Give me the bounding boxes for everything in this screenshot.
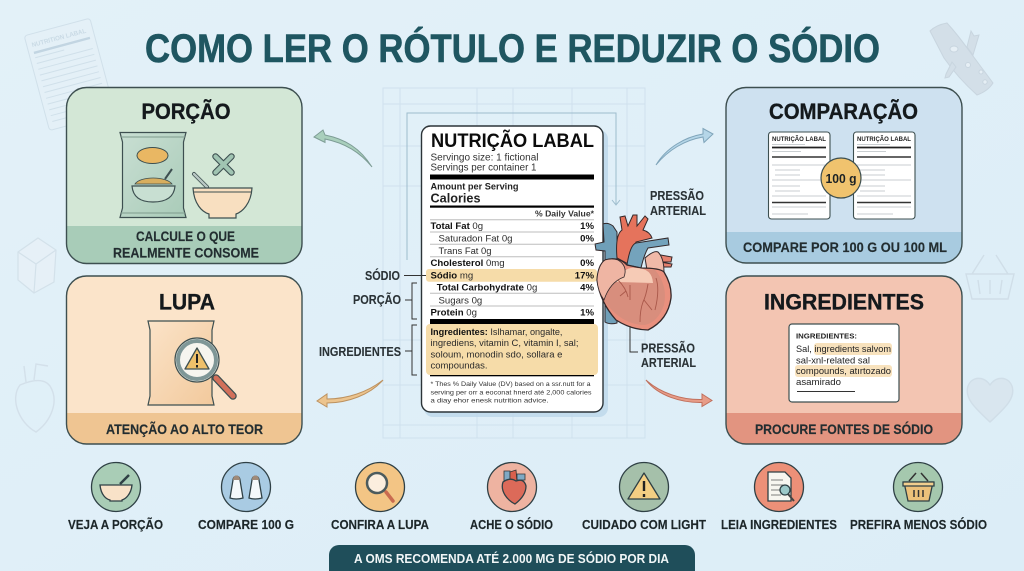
callout: sódio: SÓDIO (365, 268, 400, 283)
callout: pressão arterial bottom (630, 326, 696, 370)
nutrient rows: Total Fat 0g (430, 221, 483, 232)
carbohydrate and protein rows: Sugars 0g (438, 295, 482, 306)
servings (430, 153, 538, 174)
callout: ingredientes: INGREDIENTES (319, 344, 401, 359)
footnote: serving per orr a eoconat hnerd até 2,000 calories (430, 390, 592, 396)
banner: oms recommendation (329, 545, 695, 571)
decorative icon: heart right (967, 378, 1013, 422)
nutrient rows: 0% (580, 233, 594, 244)
step: cuidado com light: CUIDADO COM LIGHT (582, 517, 706, 532)
card: ingredients list: Sal, ingredients salvom (796, 344, 891, 355)
step: veja a porção (68, 462, 163, 532)
footer: ingredientes: PROCURE FONTES DE SÓDIO (755, 422, 933, 437)
decorative icon: nutrition label sheet (24, 18, 115, 131)
footer: porção: REALMENTE CONSOME (113, 246, 259, 260)
step: cuidado com light (582, 462, 706, 532)
step: veja a porção: VEJA A PORÇÃO (68, 517, 163, 532)
carbohydrate and protein rows: 1% (580, 307, 594, 318)
nutrient rows: 1% (580, 221, 594, 232)
calories: Calories (430, 191, 481, 205)
footnote: * Thes % Daily Value (DV) based on a ssr.nutt for a (430, 381, 591, 388)
decorative icon: artery (930, 23, 993, 95)
card: label left: NUTRIÇÃO LABAL (772, 136, 826, 143)
footer: comparação: COMPARE POR 100 G OU 100 ML (743, 240, 947, 255)
card: ingredients list: asamirado (796, 377, 841, 388)
step: compare 100 g (198, 462, 294, 532)
nutrient rows: Cholesterol 0mg (430, 258, 505, 269)
callout: pressão arterial top: PRESSÃO (650, 188, 704, 203)
callout: pressão arterial top: ARTERIAL (650, 203, 706, 218)
icon: snack bag (120, 132, 186, 218)
card: label left (768, 132, 830, 219)
nutrient rows (430, 209, 595, 269)
calories (430, 181, 519, 205)
sodium row highlight: 17% (575, 270, 594, 281)
footer: porção: CALCULE O QUE (136, 229, 235, 244)
badge: 100 g (821, 158, 861, 198)
footnote (430, 381, 592, 405)
heading: porção: PORÇÃO (142, 99, 230, 124)
carbohydrate and protein rows: 4% (580, 283, 594, 294)
footnote: a diay ehor enesk nutrition advice. (430, 398, 549, 405)
arrow: to ingredientes (646, 380, 712, 406)
calories: Amount per Serving (430, 181, 519, 192)
banner: oms recommendation: A OMS RECOMENDA ATÉ 2.000 MG DE SÓDIO POR DIA (354, 551, 670, 566)
card: ingredients list: INGREDIENTES: (796, 332, 857, 340)
callout: ingredientes (319, 325, 417, 375)
nutrient rows: Saturadon Fat 0g (438, 233, 512, 244)
step: prefira menos sódio (850, 462, 987, 532)
callout: pressão arterial bottom: ARTERIAL (641, 355, 696, 370)
carbohydrate and protein rows: Total Carbohydrate 0g (437, 283, 537, 294)
panel: porção (66, 88, 302, 264)
step: leia ingredientes (721, 462, 837, 532)
callout: pressão arterial bottom: PRESSÃO (641, 340, 695, 356)
step: ache o sódio (470, 462, 553, 532)
step: confira a lupa (331, 462, 430, 532)
ingredients highlight: compoundas. (430, 361, 488, 372)
card: ingredients list: sal-xnl-related sal (796, 356, 870, 366)
nutrient rows: 0% (580, 258, 594, 269)
sodium row highlight: Sódio mg (430, 270, 473, 281)
callout: pressão arterial top (650, 188, 706, 218)
footer: porção (113, 229, 259, 260)
heading: lupa: LUPA (159, 290, 215, 314)
card: label right (854, 132, 915, 219)
sodium row highlight (426, 269, 597, 282)
callout: porção (353, 283, 417, 319)
step: compare 100 g: COMPARE 100 G (198, 517, 294, 532)
icon: bowl (193, 174, 252, 218)
callout: porção: PORÇÃO (353, 292, 401, 307)
nutrient rows: % Daily Value* (535, 209, 595, 219)
servings: Servings per container 1 (430, 163, 537, 174)
panel: comparação (726, 88, 962, 263)
panel: ingredientes (726, 276, 962, 444)
servings: Servingo size: 1 fictional (430, 153, 538, 164)
badge: 100 g: 100 g (826, 171, 857, 186)
arrow: frame line to heart (407, 113, 620, 260)
carbohydrate and protein rows: Protein 0g (430, 307, 477, 318)
callout: sódio (365, 268, 426, 283)
decorative icon: salt crystal (18, 238, 56, 293)
card: label right: NUTRIÇÃO LABAL (857, 136, 911, 143)
decorative icon: basket (966, 255, 1014, 299)
step: leia ingredientes: LEIA INGREDIENTES (721, 517, 837, 532)
label title: NUTRIÇÃO LABAL (431, 130, 594, 152)
ingredients highlight (426, 324, 598, 375)
step: prefira menos sódio: PREFIRA MENOS SÓDIO (850, 517, 987, 532)
heading: ingredientes: INGREDIENTES (764, 290, 924, 314)
step: ache o sódio: ACHE O SÓDIO (470, 517, 553, 532)
panel: lupa (66, 276, 302, 444)
arrow: to comparação (656, 128, 713, 165)
ingredients highlight: soloum, monodin sdo, sollara e (430, 349, 562, 360)
icon: bag (148, 321, 214, 405)
icon: x mark (216, 156, 232, 172)
nutrition label (422, 126, 608, 417)
icon: magnifier with warning (175, 338, 233, 396)
arrow: to lupa (317, 380, 383, 407)
decorative icon: nutrition label sheet: NUTRITION LABAL (31, 28, 87, 49)
background grid behind label (383, 88, 645, 438)
nutrient rows: Trans Fat 0g (438, 246, 492, 257)
icon: heart (595, 215, 672, 330)
heading: comparação: COMPARAÇÃO (769, 99, 918, 124)
carbohydrate and protein rows (430, 283, 594, 318)
title: COMO LER O RÓTULO E REDUZIR O SÓDIO (145, 27, 880, 71)
step: confira a lupa: CONFIRA A LUPA (331, 517, 430, 532)
card: ingredients list: compounds, atırtozado (796, 366, 891, 377)
ingredients highlight: ingrediens, vitamin C, vitamin I, sal; (430, 338, 578, 349)
decorative icon: heart outline (16, 364, 54, 432)
ingredients highlight: Ingredientes: Islhamar, ongalte, (430, 327, 562, 338)
footer: lupa: ATENÇÃO AO ALTO TEOR (106, 422, 263, 437)
arrow: to porção (314, 130, 372, 167)
card: ingredients list (789, 324, 899, 402)
